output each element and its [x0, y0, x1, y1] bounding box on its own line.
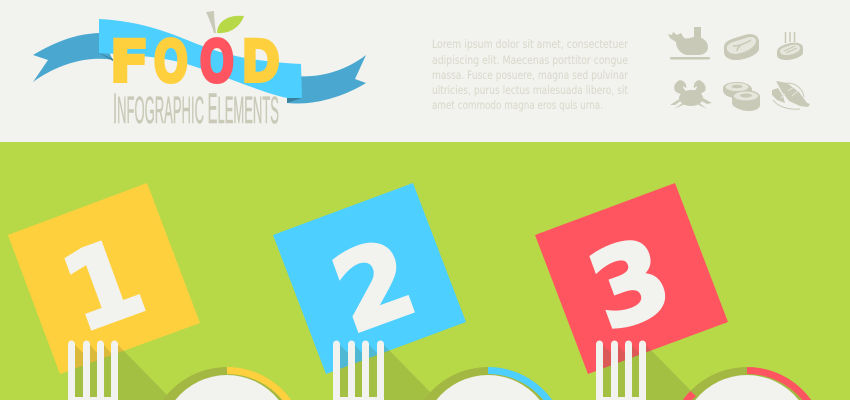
- number 2: 2: [318, 216, 430, 357]
- lorem ipsum paragraph: amet commodo magna eros quis urna.: [432, 98, 603, 112]
- letter D: D: [241, 29, 280, 96]
- plate progress arc left: [683, 391, 696, 400]
- lorem ipsum paragraph: ultricies, purus lectus malesuada libero, sit: [432, 83, 628, 97]
- lorem ipsum paragraph: adipiscing elit. Maecenas porttitor congue: [432, 53, 628, 67]
- plate ring: [683, 367, 811, 400]
- food icons: [668, 27, 810, 111]
- header band: [0, 0, 850, 142]
- fork: [333, 341, 384, 400]
- plate: [175, 375, 279, 400]
- red square: [535, 183, 728, 374]
- icon: lobster: [772, 81, 810, 109]
- plate progress arc: [747, 367, 811, 400]
- step 3: [535, 183, 811, 400]
- fork shadow: [333, 345, 438, 400]
- letter O: O: [153, 27, 188, 95]
- letter F: F: [110, 28, 149, 96]
- letter O red: O: [199, 27, 234, 95]
- icon: grilled meat: [777, 32, 803, 60]
- icon: turkey: [668, 27, 710, 60]
- icon: steak: [724, 34, 759, 60]
- plate ring: [424, 367, 552, 400]
- subtitle: INFOGRAPHIC ELEMENTS: [113, 85, 279, 133]
- yellow square: [8, 183, 200, 374]
- lorem ipsum paragraph: massa. Fusce posuere, magna sed pulvinar: [432, 68, 628, 82]
- plate: [695, 375, 799, 400]
- fork: [596, 341, 646, 400]
- plate: [436, 375, 540, 400]
- lorem ipsum paragraph: Lorem ipsum dolor sit amet, consectetuer: [432, 37, 628, 51]
- green background: [0, 142, 850, 400]
- ribbon left tail: [33, 33, 113, 82]
- number 3: 3: [574, 214, 686, 355]
- step 2: [273, 183, 552, 400]
- plate progress arc: [488, 367, 552, 400]
- blue square: [273, 183, 466, 374]
- icon: crab: [670, 80, 712, 109]
- leaf: [217, 16, 244, 33]
- fork shadow: [68, 345, 172, 400]
- lorem ipsum paragraph: [432, 37, 628, 112]
- ribbon folds: [99, 53, 302, 103]
- number 1: 1: [47, 215, 159, 356]
- ribbon main band: [99, 19, 302, 98]
- fork: [68, 341, 118, 400]
- plate progress arc: [227, 367, 291, 400]
- step 1: [8, 183, 291, 400]
- stem: [206, 11, 216, 33]
- logo: food ribbon: [33, 11, 366, 133]
- fork shadow: [596, 345, 700, 400]
- icon: sushi rolls: [723, 82, 760, 111]
- plate ring: [163, 367, 291, 400]
- ribbon right tail: [287, 55, 366, 104]
